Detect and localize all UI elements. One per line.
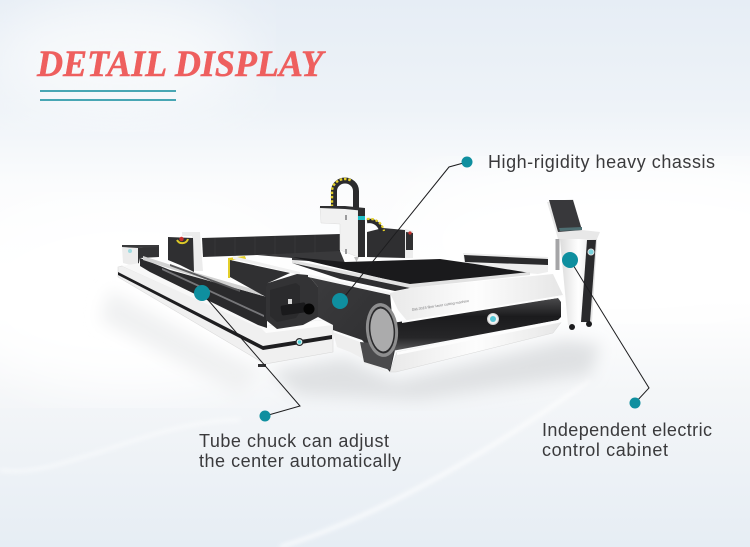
title underlines: [40, 91, 176, 100]
cutting table: [292, 257, 530, 295]
rear bed unit: [463, 253, 548, 274]
callout: tube chuck: [194, 285, 401, 471]
main bed black cylinder: [392, 295, 564, 355]
laser head with cable chain: [320, 179, 384, 262]
floor reflection: [100, 290, 600, 400]
tube end box: [122, 245, 159, 267]
laser cutting machine illustration: [100, 179, 600, 400]
callout: high-rigidity heavy chassis: High-rigidity heavy chassis: [488, 152, 715, 172]
main bed end disc: [364, 302, 400, 358]
main bed dark side: [308, 275, 395, 373]
gantry beam: [202, 234, 345, 263]
callout: tube chuck: Tube chuck can adjust: [199, 431, 389, 451]
tube support gantry: [168, 232, 203, 272]
callout: control cabinet: Independent electric: [542, 420, 712, 440]
callout: control cabinet: [542, 252, 712, 460]
callout: high-rigidity heavy chassis: [332, 152, 715, 309]
callout: control cabinet: control cabinet: [542, 440, 668, 460]
main bed white body: [390, 274, 563, 372]
callout: tube chuck: the center automatically: [199, 451, 401, 471]
rear gantry column: [367, 228, 413, 258]
title: DETAIL DISPLAY: [36, 44, 326, 85]
tube chuck: [228, 256, 318, 329]
tube bed base: [118, 263, 333, 367]
main bed white body: GM-3015 fiber laser cutting machine: [412, 299, 469, 312]
control cabinet: [547, 199, 600, 330]
tube rail and trough: [140, 256, 267, 328]
